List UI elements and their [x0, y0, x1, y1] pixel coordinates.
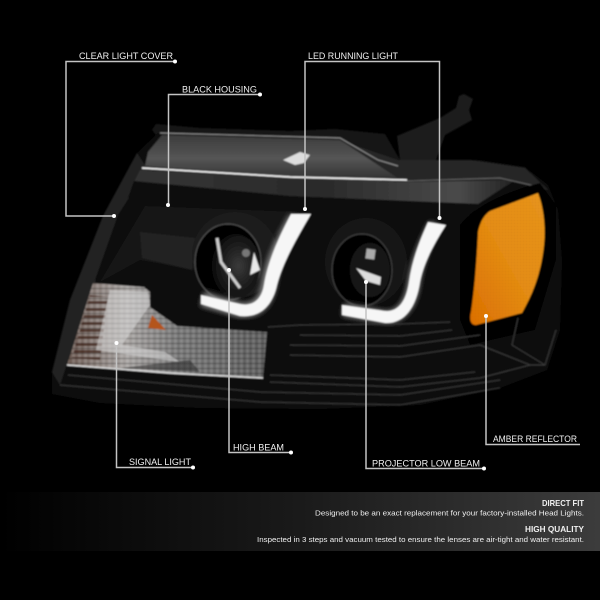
callout: signal light: SIGNAL LIGHT — [129, 457, 191, 467]
callout: amber reflector: AMBER REFLECTOR — [493, 434, 577, 444]
callout: high beam — [227, 268, 293, 454]
callout: black housing: BLACK HOUSING — [182, 84, 257, 94]
headlight assembly — [52, 94, 562, 409]
amber surround — [460, 183, 556, 345]
matte panel left — [100, 206, 300, 282]
left projector — [192, 212, 278, 300]
text: high quality description: Inspected in 3 steps and vacuum tested to ensure the lenses are air-tight and water resistant. — [257, 535, 584, 544]
top gasket — [152, 124, 400, 160]
housing body — [52, 133, 562, 409]
callout: projector low beam — [364, 280, 486, 470]
callout: amber reflector — [484, 314, 580, 444]
logo reflection — [283, 152, 310, 165]
callout: LED running light: LED RUNNING LIGHT — [308, 51, 398, 61]
left bezel edge — [52, 153, 148, 385]
upper shaded housing — [95, 190, 470, 335]
callout: clear light cover — [66, 51, 177, 218]
white top strip — [142, 168, 407, 180]
clear lens top — [145, 135, 398, 178]
right projector — [325, 218, 407, 306]
wiring connector tab — [397, 94, 473, 160]
signal light — [67, 283, 267, 378]
callout: high beam: HIGH BEAM — [233, 442, 284, 452]
callout: LED running light — [303, 51, 442, 220]
heading: direct fit: DIRECT FIT — [542, 498, 585, 508]
left LED running light — [201, 214, 311, 316]
callout: projector low beam: PROJECTOR LOW BEAM — [372, 458, 480, 468]
callout: clear light cover: CLEAR LIGHT COVER — [79, 51, 174, 61]
callout: signal light — [114, 341, 195, 470]
heading: high quality: HIGH QUALITY — [525, 524, 584, 534]
clear lens side — [340, 140, 548, 190]
callout: black housing — [166, 84, 262, 207]
amber reflector — [470, 193, 545, 325]
gray band under strip — [134, 170, 515, 204]
panel: features — [0, 492, 600, 551]
right LED running light — [342, 222, 446, 323]
text: direct fit description: Designed to be an exact replacement for your factory-installed Head Lights. — [315, 508, 584, 518]
lower ribs — [60, 318, 556, 405]
